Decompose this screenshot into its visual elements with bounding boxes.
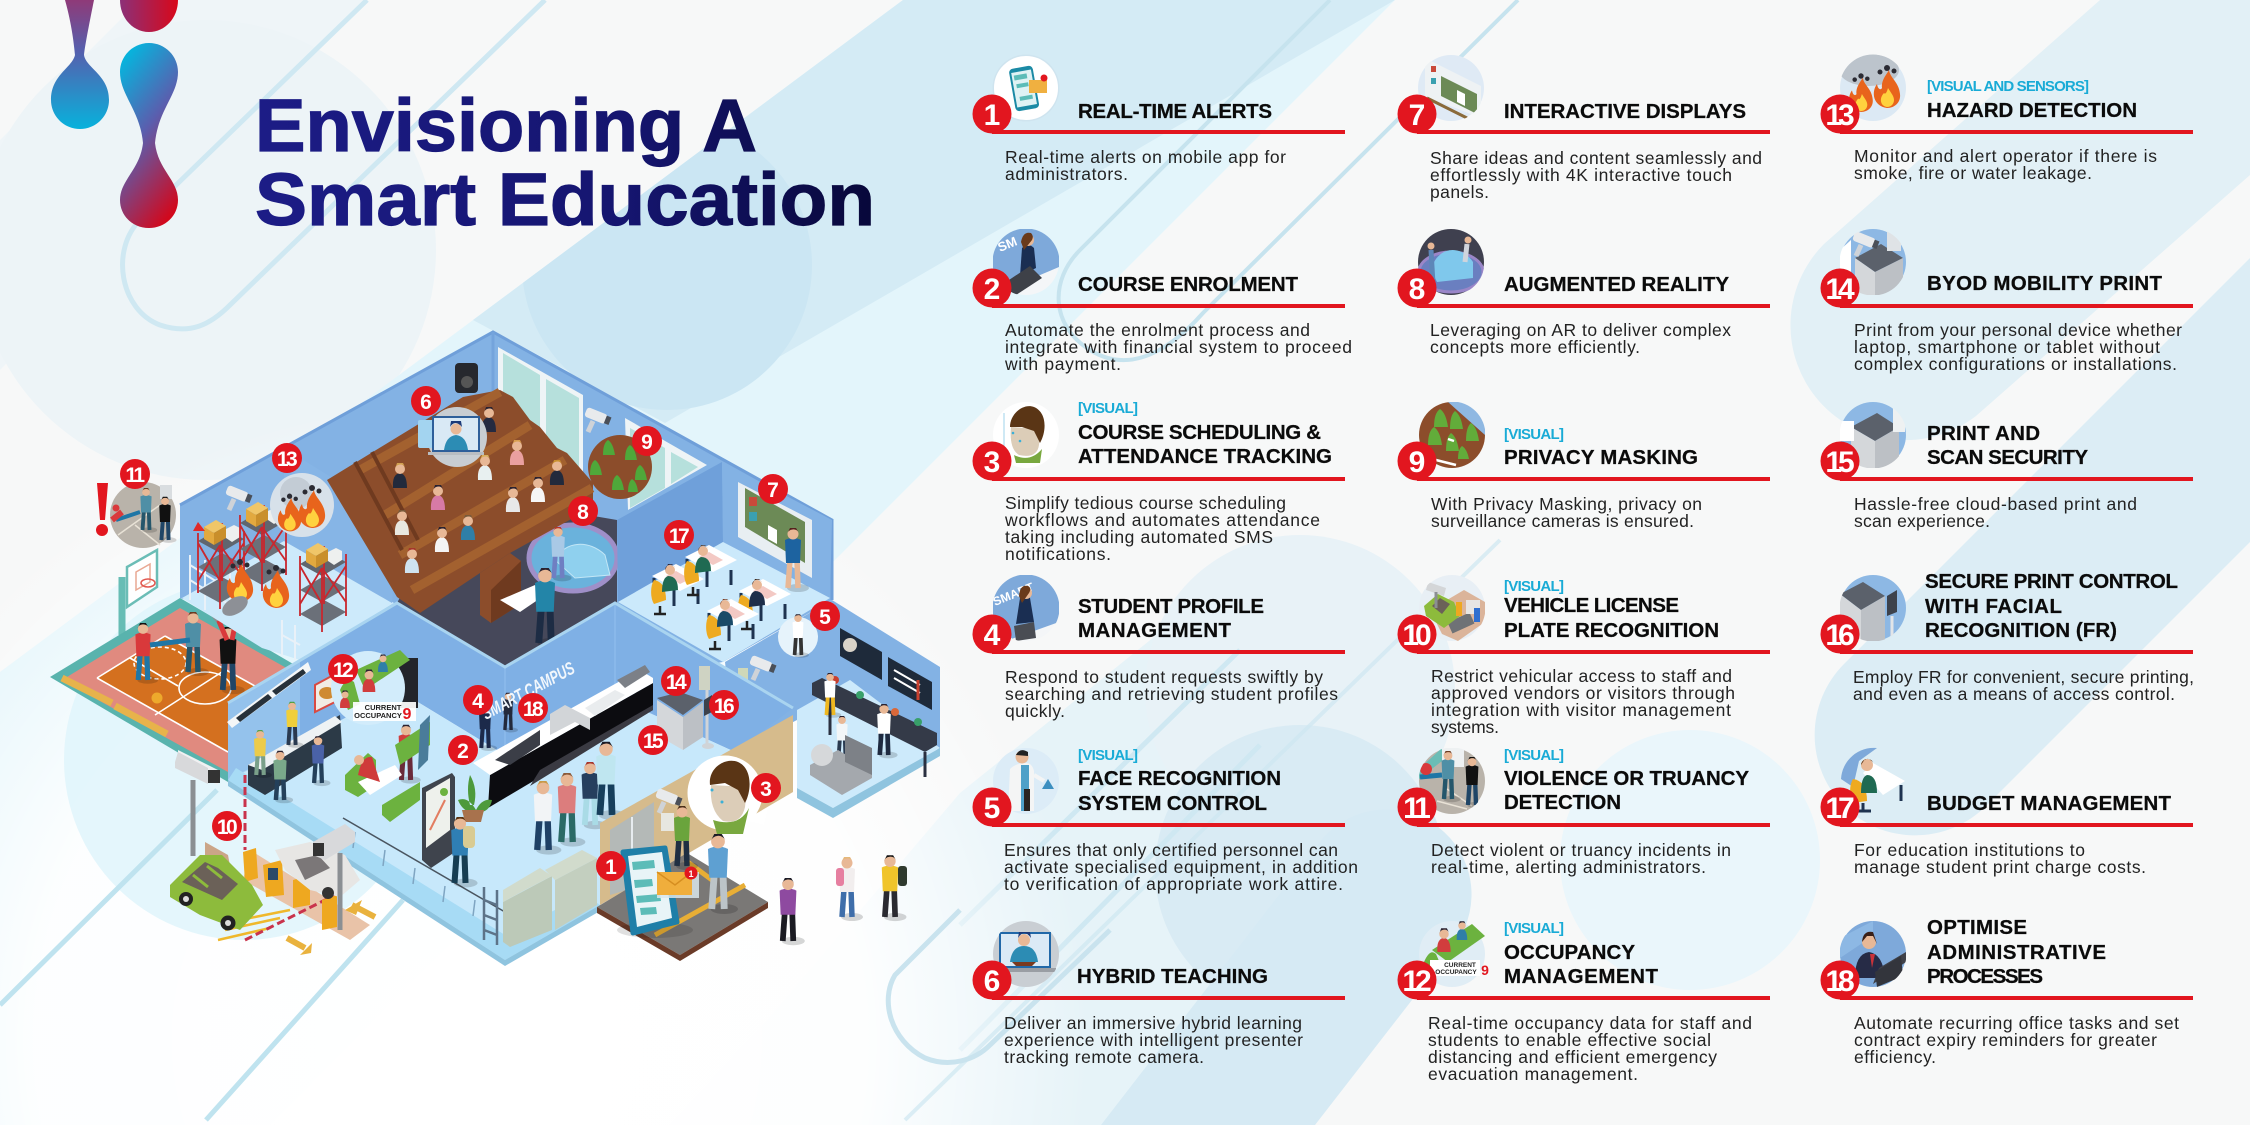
number badge 11: 11 — [1403, 792, 1430, 825]
description: contract expiry reminders for greater — [1854, 1030, 2157, 1050]
heading — [1504, 594, 1719, 642]
description — [1005, 667, 1338, 721]
icon: current occupancy — [1419, 921, 1489, 987]
panel: item 8 augmented reality — [1398, 229, 1770, 357]
description: smoke, fire or water leakage. — [1854, 163, 2092, 183]
lab — [725, 600, 940, 818]
heading: STUDENT PROFILE — [1078, 595, 1264, 618]
awning — [227, 662, 311, 728]
heading — [1078, 421, 1332, 468]
description: Hassle-free cloud-based print and — [1854, 494, 2137, 514]
heading: ATTENDANCE TRACKING — [1078, 445, 1332, 468]
heading — [1504, 941, 1658, 988]
cafeteria — [248, 658, 430, 822]
classroom — [617, 462, 832, 662]
map number markers: 9 — [641, 431, 653, 454]
main hall — [227, 603, 793, 966]
map number markers: 16 — [714, 695, 734, 718]
icon: student at desk — [1841, 748, 1905, 811]
heading: MANAGEMENT — [1078, 619, 1231, 642]
description — [1430, 148, 1762, 202]
description — [1004, 493, 1320, 564]
occupancy bubble: CURRENT — [365, 703, 402, 712]
description: efficiency. — [1854, 1047, 1936, 1067]
panel: item 17 budget management — [1820, 748, 2193, 877]
map number markers: 2 — [457, 740, 469, 763]
description: integrate with financial system to proceed — [1005, 337, 1352, 357]
description — [1004, 840, 1358, 894]
map number markers — [120, 386, 840, 881]
number badge 10 — [1398, 614, 1436, 654]
description: laptop, smartphone or tablet without — [1854, 337, 2160, 357]
description: activate specialised equipment, in addition — [1004, 857, 1358, 877]
description: Automate the enrolment process and — [1005, 320, 1310, 340]
tag: [VISUAL] — [1078, 747, 1138, 764]
heading: VIOLENCE OR TRUANCY — [1504, 767, 1749, 790]
panel: item 9 privacy masking — [1398, 402, 1770, 531]
heading: FACE RECOGNITION — [1078, 767, 1281, 790]
description: evacuation management. — [1428, 1064, 1638, 1084]
heading: AUGMENTED REALITY — [1504, 273, 1729, 296]
description — [1004, 320, 1352, 374]
student group walking — [534, 742, 626, 855]
description — [1854, 840, 2146, 877]
heading: BYOD MOBILITY PRINT — [1927, 272, 2162, 295]
heading: HYBRID TEACHING — [1077, 965, 1268, 988]
number badge 17 — [1820, 788, 1860, 826]
storage boxes and shelf — [484, 850, 597, 947]
number badge 18 — [1820, 960, 1860, 1000]
number badge 7 — [1398, 94, 1436, 134]
tag: [VISUAL AND SENSORS] — [1927, 78, 2089, 95]
icon: scientist — [993, 748, 1059, 814]
auditorium windows — [498, 347, 707, 510]
description — [1005, 147, 1286, 184]
map number markers: 8 — [577, 501, 589, 524]
panel: item 10 vehicle license plate recognition — [1398, 575, 1770, 737]
heading: ADMINISTRATIVE — [1927, 941, 2106, 964]
heading — [1927, 422, 2088, 469]
number badge 2 — [972, 268, 1012, 308]
number badge 5: 5 — [984, 792, 1000, 825]
description — [1004, 1013, 1303, 1067]
description: tracking remote camera. — [1004, 1047, 1204, 1067]
description: and even as a means of access control. — [1853, 684, 2175, 704]
icon: printer with camera — [1840, 229, 1906, 295]
icon: admin at monitor — [1840, 921, 1906, 987]
heading: BUDGET MANAGEMENT — [1927, 792, 2171, 815]
map number markers: 3 — [760, 778, 772, 801]
icon: current occupancy: OCCUPANCY — [1435, 969, 1477, 976]
tag: [VISUAL] — [1078, 400, 1138, 417]
potted plant and wayfinding kiosk — [422, 773, 492, 887]
heading: PRINT AND — [1927, 422, 2040, 445]
icon: current occupancy: CURRENT — [1444, 962, 1476, 969]
description: Respond to student requests swiftly by — [1005, 667, 1323, 687]
heading: PROCESSES — [1927, 965, 2043, 988]
description: complex configurations or installations. — [1854, 354, 2177, 374]
description: Real-time alerts on mobile app for — [1005, 147, 1286, 167]
description: manage student print charge costs. — [1854, 857, 2146, 877]
number badge 9 — [1398, 442, 1436, 480]
reception desk — [473, 665, 653, 808]
heading — [1925, 570, 2178, 642]
heading: SECURE PRINT CONTROL — [1925, 570, 2178, 593]
number badge 3: 3 — [984, 446, 1000, 479]
icon: current occupancy: 9 — [1481, 962, 1489, 978]
description — [1431, 840, 1731, 877]
hybrid teaching bubble and camera — [418, 363, 487, 467]
map number markers: 1 — [605, 856, 617, 879]
panel: item 11 violence or truancy detection — [1398, 747, 1770, 877]
licence plate recognition parking — [170, 750, 375, 955]
description: to verification of appropriate work attire. — [1004, 874, 1343, 894]
tag: [VISUAL] — [1504, 747, 1564, 764]
description: administrators. — [1005, 164, 1128, 184]
heading: REAL-TIME ALERTS — [1078, 100, 1272, 123]
description: For education institutions to — [1854, 840, 2085, 860]
description: Ensures that only certified personnel can — [1004, 840, 1338, 860]
logo — [51, 0, 178, 228]
people outside — [780, 855, 907, 945]
panel: item 7 interactive displays — [1398, 55, 1770, 202]
number badge 10: 10 — [1402, 619, 1431, 652]
map number markers: 6 — [420, 391, 432, 414]
description: real-time, alerting administrators. — [1431, 857, 1706, 877]
number badge 8 — [1398, 268, 1436, 308]
panel: item 15 print and scan security — [1820, 402, 2193, 531]
icon: phone with envelope — [993, 55, 1059, 121]
number badge 18: 18 — [1825, 965, 1854, 998]
description: distancing and efficient emergency — [1428, 1047, 1717, 1067]
number badge 14 — [1820, 268, 1860, 308]
heading — [1504, 767, 1749, 814]
description — [1854, 494, 2137, 531]
number badge 13: 13 — [1825, 99, 1854, 132]
back walls — [180, 332, 832, 700]
icon: receptionist with smart wall: SMART — [991, 580, 1036, 609]
heading: SYSTEM CONTROL — [1078, 792, 1267, 815]
description: with payment. — [1004, 354, 1121, 374]
title: Envisioning A — [255, 84, 757, 167]
panel: item 5 face recognition system control — [972, 747, 1358, 894]
description: workflows and automates attendance — [1004, 510, 1320, 530]
number badge 5 — [972, 788, 1012, 826]
description: Simplify tedious course scheduling — [1005, 493, 1286, 513]
description — [1430, 320, 1731, 357]
basketball court — [50, 550, 300, 782]
description — [1854, 146, 2157, 183]
icon: face scan — [1003, 406, 1045, 463]
number badge 15: 15 — [1825, 446, 1854, 479]
description: taking including automated SMS — [1005, 527, 1273, 547]
large phone alert — [617, 848, 699, 938]
number badge 9: 9 — [1409, 446, 1425, 479]
panel: item 12 occupancy management — [1398, 920, 1770, 1084]
map number markers: 4 — [472, 690, 484, 713]
panel: item 6 hybrid teaching — [972, 921, 1345, 1067]
number badge 17: 17 — [1825, 792, 1854, 825]
violence detection bubble — [110, 482, 177, 548]
number badge 1 — [972, 94, 1012, 134]
description: With Privacy Masking, privacy on — [1431, 494, 1702, 514]
map number markers: 12 — [333, 659, 353, 682]
number badge 2: 2 — [984, 273, 1000, 306]
number badge 1: 1 — [984, 99, 1000, 132]
heading: DETECTION — [1504, 791, 1621, 814]
description: surveillance cameras is ensured. — [1431, 511, 1694, 531]
heading: MANAGEMENT — [1504, 965, 1658, 988]
map number markers: 11 — [125, 464, 145, 487]
description: effortlessly with 4K interactive touch — [1430, 165, 1732, 185]
number badge 16 — [1820, 614, 1860, 654]
icon: laptop presenter — [993, 921, 1059, 987]
description: notifications. — [1005, 544, 1111, 564]
description — [1428, 1013, 1752, 1084]
heading: VEHICLE LICENSE — [1504, 594, 1679, 617]
description: Restrict vehicular access to staff and — [1431, 666, 1732, 686]
description: scan experience. — [1854, 511, 1990, 531]
description: searching and retrieving student profiles — [1005, 684, 1338, 704]
description: panels. — [1430, 182, 1489, 202]
map number markers: 5 — [819, 606, 831, 629]
panel: item 3 course scheduling and attendance tracking — [972, 400, 1345, 564]
heading: HAZARD DETECTION — [1927, 99, 2137, 122]
tag: [VISUAL] — [1504, 578, 1564, 595]
heading — [1927, 916, 2106, 988]
exclamation mark — [96, 483, 108, 536]
panel: item 4 student profile management — [972, 575, 1345, 721]
number badge 4 — [972, 614, 1012, 654]
number badge 16: 16 — [1825, 619, 1854, 652]
map number markers: 7 — [767, 479, 779, 502]
number badge 7: 7 — [1409, 99, 1425, 132]
description: Share ideas and content seamlessly and — [1430, 148, 1762, 168]
description: Deliver an immersive hybrid learning — [1004, 1013, 1302, 1033]
heading: COURSE SCHEDULING & — [1078, 421, 1321, 444]
number badge 6 — [972, 960, 1012, 1000]
description: Leveraging on AR to deliver complex — [1430, 320, 1731, 340]
heading: RECOGNITION (FR) — [1925, 619, 2117, 642]
icon: AR car — [1418, 229, 1484, 295]
number badge 12: 12 — [1402, 965, 1431, 998]
number badge 4: 4 — [984, 619, 1001, 652]
description: systems. — [1431, 717, 1499, 737]
map number markers: 15 — [643, 730, 664, 753]
map number markers: 17 — [669, 525, 689, 548]
panel: item 1 real-time alerts — [972, 55, 1345, 184]
description: integration with visitor management — [1431, 700, 1731, 720]
entrance with tan wall and doors — [597, 715, 793, 961]
isometric campus illustration — [50, 332, 940, 966]
number badge 3 — [972, 442, 1012, 480]
auditorium floor and brown tiers — [327, 390, 617, 667]
description: Print from your personal device whether — [1854, 320, 2182, 340]
description: Real-time occupancy data for staff and — [1428, 1013, 1752, 1033]
description — [1854, 320, 2182, 374]
panel: item 2 course enrolment — [972, 229, 1352, 374]
tag: [VISUAL] — [1504, 426, 1564, 443]
icon: printer with face tablet — [1840, 575, 1906, 641]
heading — [1078, 595, 1264, 642]
description — [1853, 667, 2194, 704]
occupancy bubble: OCCUPANCY — [354, 711, 402, 720]
icon: multifunction printer — [1840, 402, 1906, 468]
heading: WITH FACIAL — [1925, 595, 2062, 618]
number badge 12 — [1398, 960, 1436, 1000]
heading: COURSE ENROLMENT — [1078, 273, 1298, 296]
icon: woman at desk — [993, 229, 1059, 295]
printer and kiosk — [657, 666, 714, 750]
occupancy bubble — [331, 650, 416, 725]
description: Automate recurring office tasks and set — [1854, 1013, 2179, 1033]
smart campus wall text: SMART CAMPUS — [478, 658, 578, 724]
icon: masked audience — [1419, 402, 1485, 468]
map number markers: 18 — [523, 698, 544, 721]
panel: item 14 BYOD mobility print — [1820, 229, 2193, 374]
heading: OCCUPANCY — [1504, 941, 1635, 964]
title: Smart Education — [255, 158, 875, 241]
number badge 6: 6 — [984, 965, 1000, 998]
description: students to enable effective social — [1428, 1030, 1711, 1050]
description: Employ FR for convenient, secure printing, — [1853, 667, 2194, 687]
description: Detect violent or truancy incidents in — [1431, 840, 1731, 860]
icon: fighting students — [1419, 748, 1485, 814]
description — [1431, 666, 1735, 737]
icon: interactive board — [1418, 55, 1484, 121]
description: experience with intelligent presenter — [1004, 1030, 1303, 1050]
heading: SCAN SECURITY — [1927, 446, 2088, 469]
panel: item 16 secure print control with facial recognition — [1820, 570, 2194, 704]
title — [255, 84, 875, 241]
map number markers: 13 — [277, 448, 297, 471]
description: Monitor and alert operator if there is — [1854, 146, 2157, 166]
icon: woman at desk: SM — [996, 234, 1019, 255]
heading: INTERACTIVE DISPLAYS — [1504, 100, 1746, 123]
description: concepts more efficiently. — [1430, 337, 1640, 357]
heading — [1078, 767, 1281, 815]
map number markers: 10 — [217, 816, 237, 839]
number badge 14: 14 — [1825, 273, 1855, 306]
number badge 13 — [1820, 94, 1860, 134]
occupancy bubble: 9 — [403, 706, 412, 723]
large phone alert: 1 — [688, 869, 694, 879]
tag: [VISUAL] — [1504, 920, 1564, 937]
description — [1431, 494, 1702, 531]
description: quickly. — [1005, 701, 1065, 721]
map number markers: 14 — [666, 671, 687, 694]
panel: item 13 hazard detection — [1820, 54, 2193, 183]
description — [1854, 1013, 2179, 1067]
heading: PLATE RECOGNITION — [1504, 619, 1719, 642]
description: approved vendors or visitors through — [1431, 683, 1735, 703]
number badge 8: 8 — [1409, 273, 1425, 306]
number badge 15 — [1820, 442, 1860, 480]
heading: PRIVACY MASKING — [1504, 446, 1698, 469]
icon: smoke and flames — [1839, 54, 1906, 121]
number badge 11 — [1398, 788, 1436, 826]
face recognition bubble — [688, 756, 768, 834]
icon: receptionist with smart wall — [991, 575, 1059, 641]
privacy masking bubble — [584, 407, 652, 499]
icon: car and gate — [1419, 575, 1485, 641]
hazard room floor and racks — [182, 448, 397, 660]
heading: OPTIMISE — [1927, 916, 2027, 939]
panel: item 18 optimise administrative processes — [1820, 916, 2193, 1067]
